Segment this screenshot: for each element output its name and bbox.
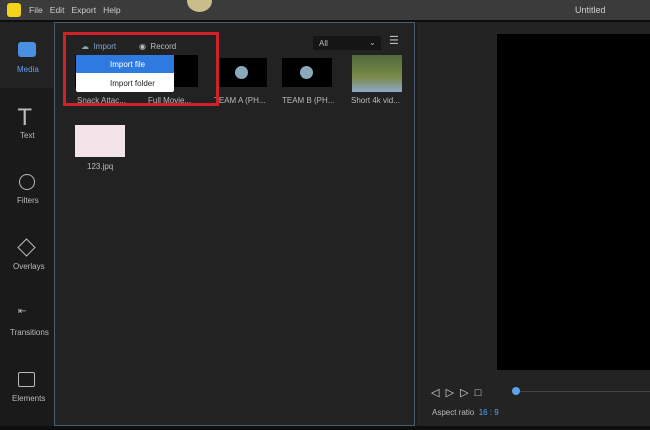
image thumbnail 123.jpg	[75, 125, 125, 157]
dropdown menu: Import folder	[110, 79, 155, 88]
tab: text: T	[18, 106, 31, 131]
filter dropdown: ⌄	[369, 38, 376, 47]
tab: media: Media	[17, 65, 39, 74]
top menu bar	[0, 0, 650, 20]
tab: overlays	[13, 238, 45, 271]
tab: transitions	[10, 306, 49, 337]
list icon: ☰	[389, 35, 399, 47]
aspect ratio: Aspect ratio 16 : 9	[432, 408, 499, 417]
preview panel	[417, 22, 650, 426]
app logo icon	[7, 3, 21, 17]
tab: elements	[12, 372, 46, 403]
media panel: 123.jpq	[87, 162, 113, 171]
thumbnails row: Snack Attac...	[77, 96, 126, 105]
thumbnails row	[75, 55, 402, 105]
tab: filters: Filters	[17, 196, 39, 205]
media panel	[54, 22, 415, 426]
import button: ☁ Import	[81, 42, 116, 51]
tab: elements: Elements	[12, 394, 45, 403]
tab: media	[0, 22, 56, 88]
dropdown menu	[76, 55, 174, 92]
tab: overlays: Overlays	[13, 262, 45, 271]
tab: transitions: Transitions	[10, 328, 49, 337]
title: Untitled	[575, 5, 606, 15]
filter dropdown: All	[319, 39, 328, 48]
highlight box: import menu	[63, 32, 219, 106]
dropdown menu: Import file	[110, 60, 145, 69]
left sidebar	[0, 22, 54, 430]
tab: text: Text	[20, 131, 35, 140]
playback controls: ◁ ▷ ▷ □	[431, 387, 481, 399]
tab: text	[18, 106, 35, 140]
menu items: File Edit Export Help	[29, 5, 121, 15]
thumbnails row: TEAM B (PH...	[282, 96, 334, 105]
filter dropdown	[313, 36, 381, 50]
record button: ◉ Record	[139, 42, 176, 51]
thumbnails row: TEAM A (PH...	[214, 96, 266, 105]
video area	[497, 34, 650, 370]
thumbnails row: Short 4k vid...	[351, 96, 400, 105]
tab: filters	[17, 174, 39, 205]
thumbnails row: Full Movie...	[148, 96, 191, 105]
tab: transitions: ⇤	[18, 306, 26, 317]
cursor highlight	[187, 0, 212, 12]
